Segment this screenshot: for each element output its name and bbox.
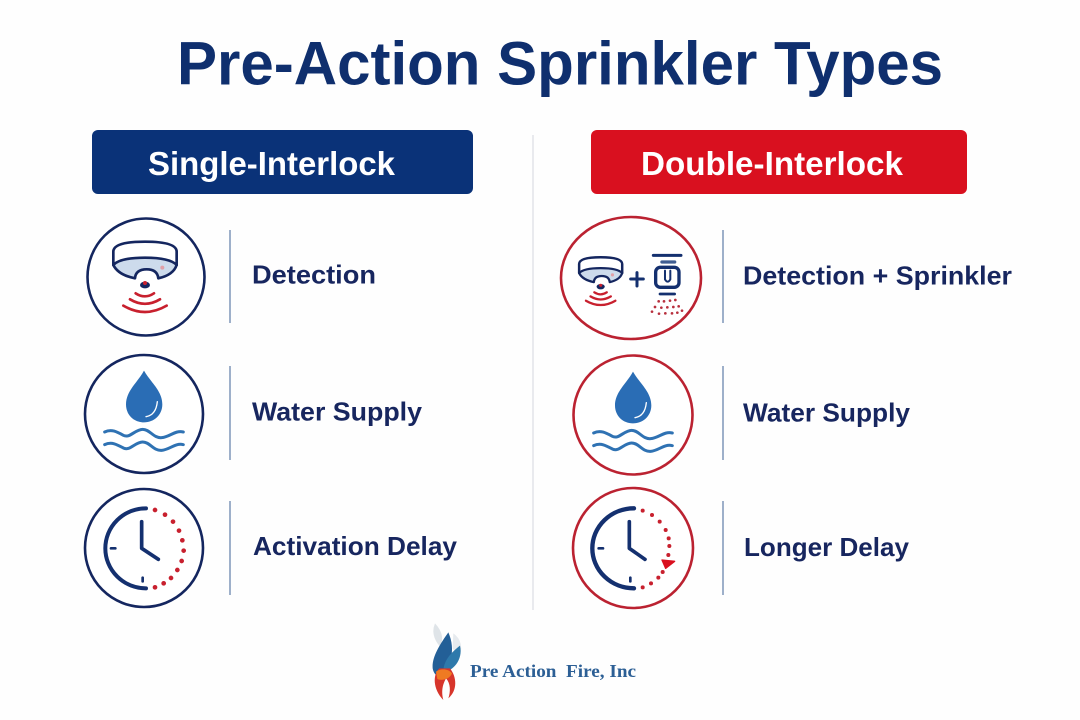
- icon: flame: [433, 623, 461, 700]
- panel: single-interlock: [85, 130, 473, 607]
- divider and label: longer delay: Longer Delay: [744, 532, 910, 562]
- text: company name: Pre Action Fire, Inc: [470, 661, 636, 681]
- divider and label: activation delay: Activation Delay: [253, 531, 458, 561]
- heading: double-interlock: Double-Interlock: [641, 145, 904, 182]
- icon: clock longer delay: [573, 488, 693, 608]
- heading: double-interlock: [591, 130, 967, 194]
- icon: detector plus sprinkler: [561, 217, 701, 339]
- heading: single-interlock: Single-Interlock: [148, 145, 396, 182]
- panel: double-interlock: [561, 130, 1012, 608]
- divider and label: water supply: Water Supply: [252, 396, 423, 426]
- divider and label: water supply: Water Supply: [743, 398, 911, 428]
- divider and label: detection: Detection: [252, 260, 376, 290]
- icon: water supply: [574, 356, 692, 474]
- title: Pre-Action Sprinkler Types: [177, 30, 943, 98]
- logo: pre action fire: [433, 623, 636, 700]
- icon: smoke detector: [88, 218, 204, 336]
- heading: single-interlock: [92, 130, 473, 194]
- icon: clock activation delay: [85, 489, 203, 607]
- divider and label: detection plus sprinkler: Detection + Sprinkler: [743, 260, 1012, 290]
- icon: water supply: [85, 355, 203, 473]
